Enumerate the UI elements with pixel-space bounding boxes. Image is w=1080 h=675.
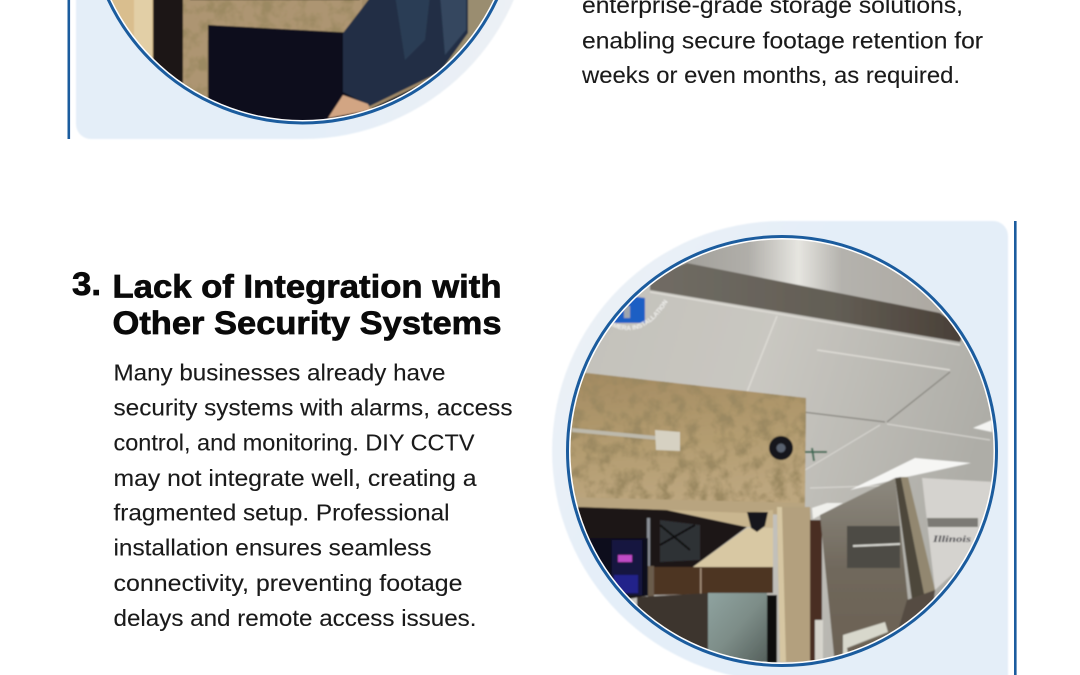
accent line: section 2 left — [68, 0, 70, 139]
text block: section 3 body: fragmented setup. Professional — [114, 500, 450, 526]
panel: section 3 photo backdrop — [552, 221, 1008, 675]
panel: section 2 photo backdrop — [76, 0, 533, 139]
text block: section 2 closing lines: enabling secure footage retention for — [582, 27, 983, 53]
photo: CCTV dome cameras in a commercial kitchen, circular frame — [566, 235, 998, 667]
text block: section 3 body: may not integrate well, creating a — [114, 465, 477, 491]
underside and store — [560, 497, 805, 515]
pillar — [782, 506, 811, 662]
accent line: section 3 right — [1014, 221, 1017, 675]
text block: section 3 body: control, and monitoring. DIY CCTV — [114, 430, 475, 456]
photo: technician at wall opening in circular frame — [106, 0, 498, 124]
text block: section 3 body: connectivity, preventing footage — [114, 570, 462, 596]
text block: section 2 closing lines: weeks or even months, as required. — [581, 62, 960, 88]
photo: CCTV dome cameras in a commercial kitchen, circular frame: CAMERA INSTALLATION — [612, 300, 668, 330]
text block: section 3 body: delays and remote access issues. — [114, 605, 476, 631]
lights — [850, 458, 971, 490]
text block: section 2 closing lines — [581, 0, 983, 88]
text block: section 3 body: installation ensures seamless — [114, 535, 432, 561]
heading: section 3: Other Security Systems — [112, 305, 501, 341]
cabinets — [820, 478, 912, 665]
wall and fixtures — [560, 372, 806, 504]
text block: section 3 body: security systems with alarms, access — [114, 394, 512, 420]
text block: section 3 body — [114, 360, 512, 631]
logo watermark — [613, 296, 645, 323]
photo: CCTV dome cameras in a commercial kitchen, circular frame: Illinois — [932, 534, 972, 544]
text block: section 3 body: Many businesses already have — [114, 360, 446, 386]
heading: section 3 — [112, 268, 502, 341]
number: 3: 3. — [72, 266, 101, 302]
heading: section 3: Lack of Integration with — [112, 268, 502, 304]
